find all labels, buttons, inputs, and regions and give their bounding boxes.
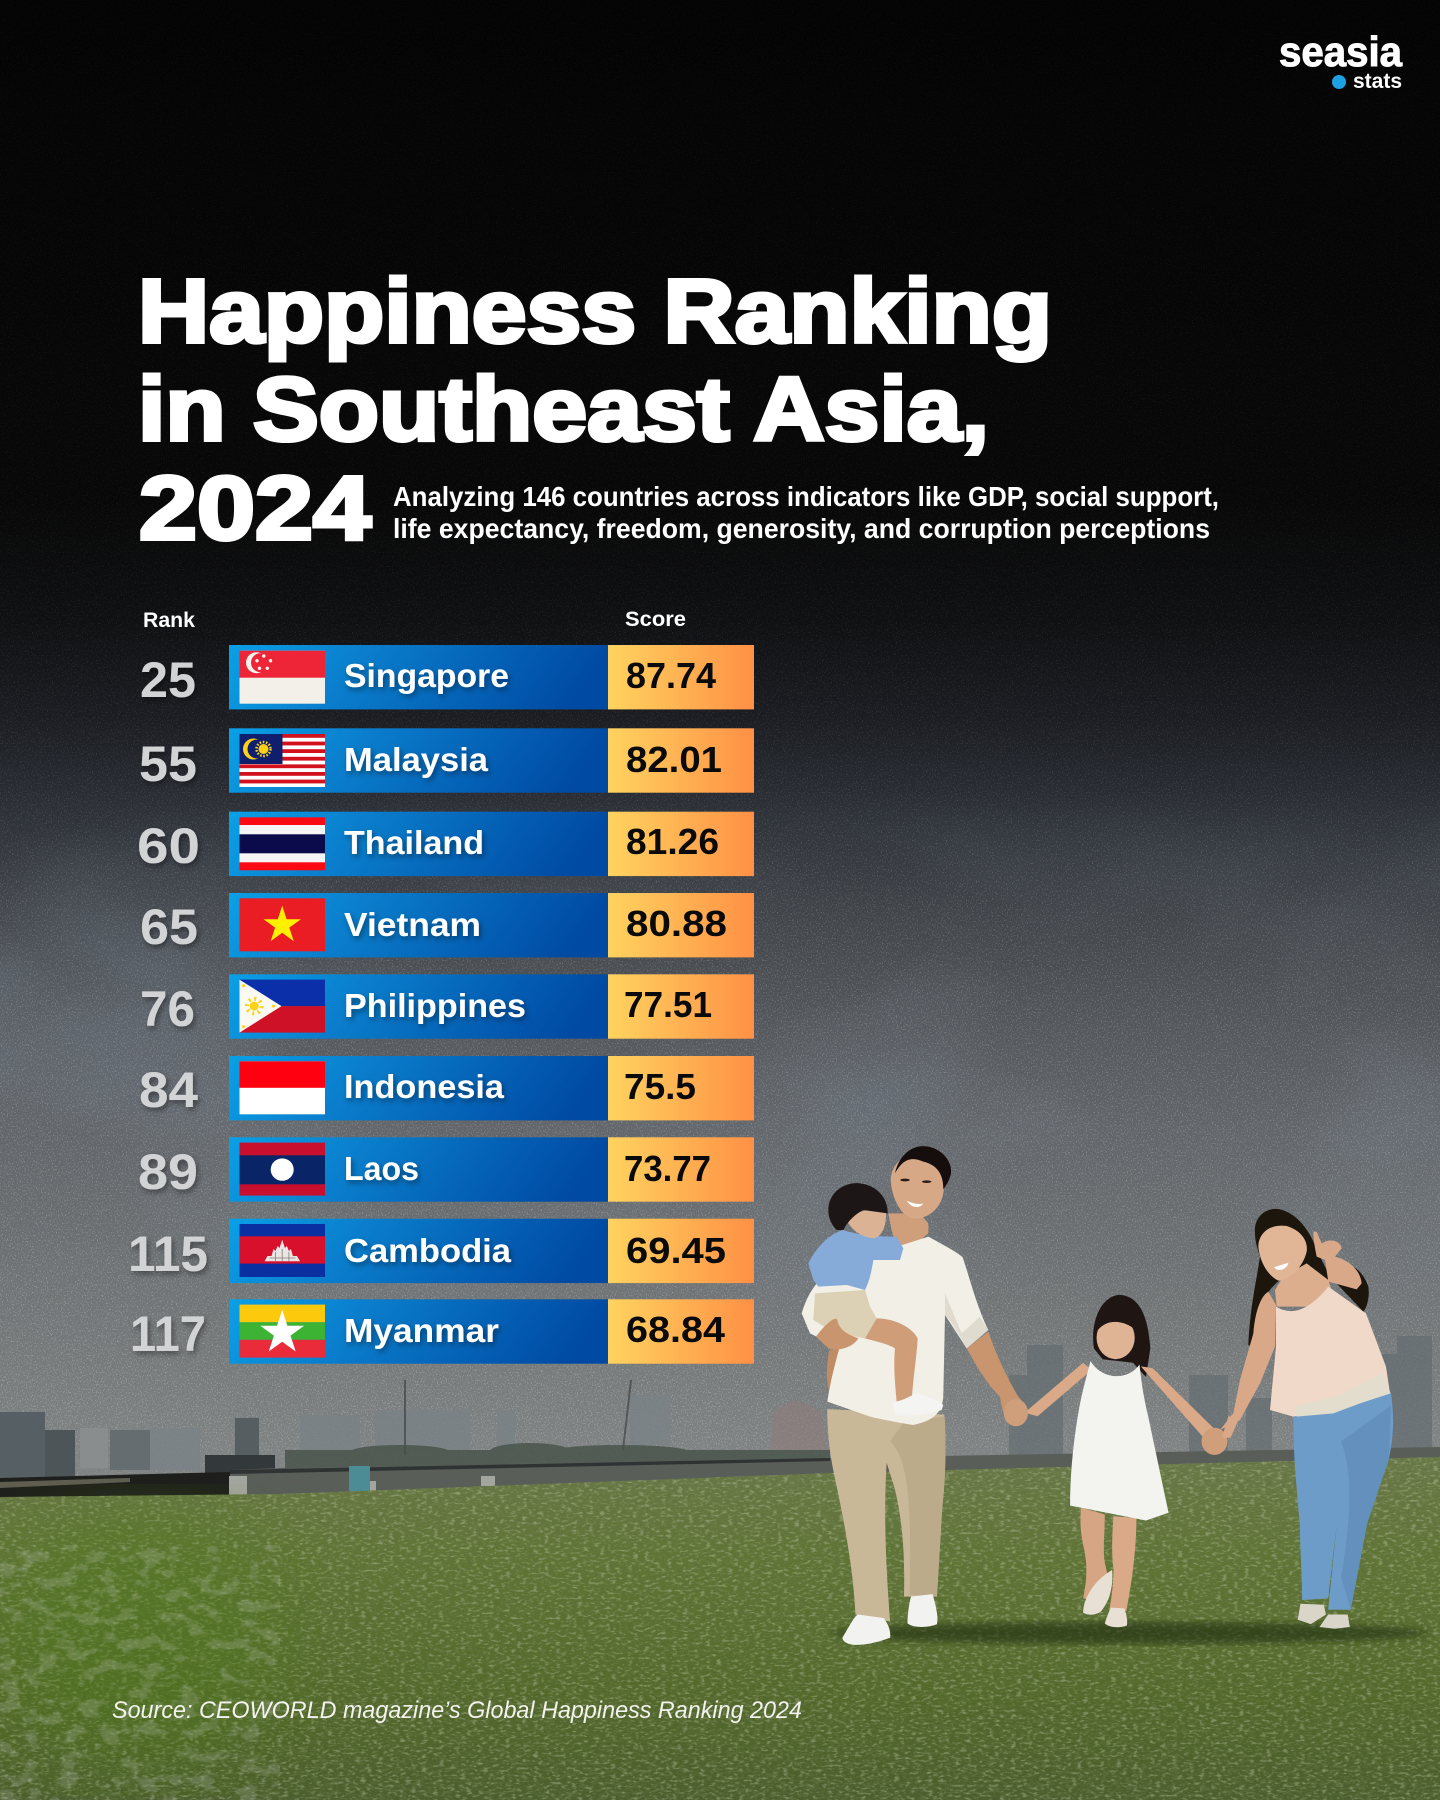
logo: seasia stats: stats [1353,70,1402,93]
row: Myanmar: Myanmar [344,1312,499,1349]
row: Thailand [137,812,754,876]
row: Malaysia [139,728,754,793]
flag: Singapore [240,651,325,704]
column heading: rank: Rank [143,609,195,632]
background: city skyline [0,1336,1432,1482]
logo: seasia stats: seasia [1279,28,1403,75]
row: Myanmar: 68.84 [626,1309,725,1350]
row: Philippines: 76 [140,981,195,1037]
column heading: score: Score [625,608,686,631]
subtitle: Analyzing 146 countries across indicators like GDP, social support, [393,481,1219,512]
row: Laos: Laos [344,1150,419,1187]
photo: family walking hand in hand [802,1146,1430,1645]
shadow on grass [830,1622,1430,1644]
row: Laos: 73.77 [624,1148,711,1189]
row: Malaysia: 82.01 [626,739,722,780]
row: Philippines [140,974,754,1039]
row: Laos: 89 [138,1144,198,1200]
title: in Southeast Asia, [138,360,989,460]
flag: Laos [240,1143,325,1196]
row: Malaysia: Malaysia [344,741,489,778]
row: Indonesia: 84 [139,1062,198,1118]
row: Singapore: 25 [140,652,196,708]
row: Cambodia: 69.45 [626,1230,726,1271]
flag: Indonesia [240,1061,325,1114]
son [808,1230,903,1290]
title: Happiness Ranking [138,262,1052,362]
background: embankment wall [0,1447,1440,1498]
person: father and son upper body [802,1146,1025,1426]
row: Singapore: 87.74 [626,655,716,696]
flag: Vietnam [240,898,325,951]
person: mother legs [1222,1393,1393,1629]
flag: Cambodia [240,1224,325,1277]
row: Laos [138,1137,754,1202]
row: Vietnam [140,893,754,957]
row: Cambodia: Cambodia [344,1232,512,1269]
subtitle: life expectancy, freedom, generosity, and corruption perceptions [393,513,1210,544]
row: Singapore: Singapore [344,657,509,694]
person: father legs [827,1409,946,1645]
row: Vietnam: Vietnam [344,906,481,943]
person: mother upper body [1220,1209,1391,1430]
row: Indonesia: Indonesia [344,1068,505,1105]
row: Indonesia: 75.5 [624,1066,696,1107]
row: Thailand: Thailand [344,824,484,861]
source note: Source: CEOWORLD magazine’s Global Happiness Ranking 2024 [112,1697,802,1724]
row: Myanmar: 117 [130,1306,206,1362]
row: Philippines: Philippines [344,987,526,1024]
row: Myanmar [130,1299,754,1364]
row: Cambodia [128,1219,754,1283]
row: Thailand: 60 [137,818,200,874]
row: Indonesia [139,1056,754,1120]
title: 2024 [139,459,371,559]
subtitle [393,481,1219,544]
row: Cambodia: 115 [128,1226,208,1282]
flag: Thailand [240,817,325,870]
flag: Myanmar [240,1305,325,1358]
row: Singapore [140,645,754,709]
person: daughter in white dress [1004,1295,1228,1627]
row: Thailand: 81.26 [626,821,719,862]
background: grass field [0,1457,1440,1800]
row: Malaysia: 55 [139,736,197,792]
row: Vietnam: 65 [140,899,198,955]
title [138,262,1052,559]
flag: Philippines [240,980,325,1033]
row: Vietnam: 80.88 [626,903,727,944]
row: Philippines: 77.51 [624,984,712,1025]
flag: Malaysia [240,734,325,787]
